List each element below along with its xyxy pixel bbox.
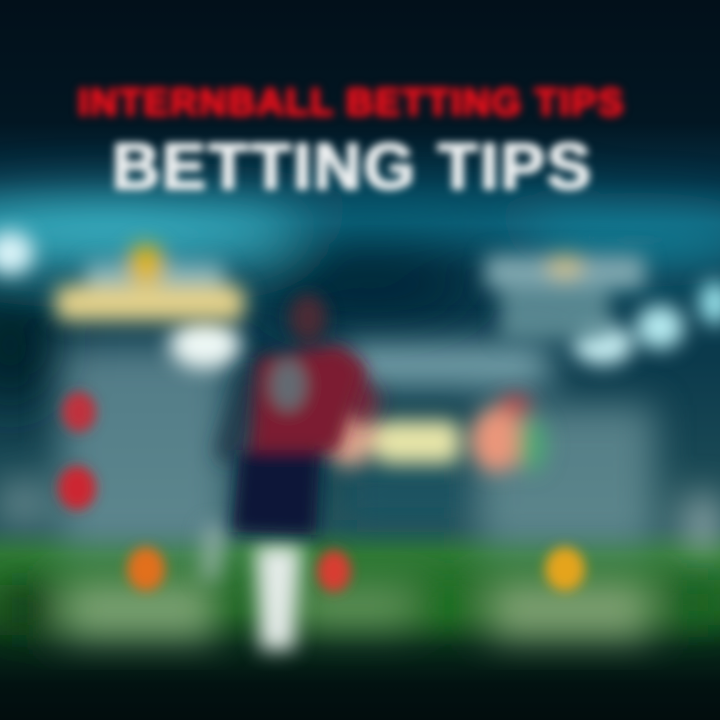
title line: red: INTERNBALL BETTING TIPS — [78, 82, 625, 124]
top-right callout panel — [485, 253, 645, 340]
head — [289, 294, 327, 342]
shorts — [232, 450, 320, 535]
left red markers — [58, 392, 96, 510]
stands — [0, 345, 720, 555]
jersey — [250, 345, 365, 452]
legs — [255, 545, 302, 650]
bottom markers — [127, 547, 585, 592]
top-left callout panel — [55, 244, 245, 321]
player — [200, 294, 382, 650]
pitch patches — [0, 580, 720, 640]
floodlights — [0, 231, 720, 369]
stadium light glow — [0, 189, 720, 405]
arms — [215, 365, 262, 465]
title line: white: BETTING TIPS — [112, 129, 593, 203]
football and colour strip — [324, 396, 547, 472]
